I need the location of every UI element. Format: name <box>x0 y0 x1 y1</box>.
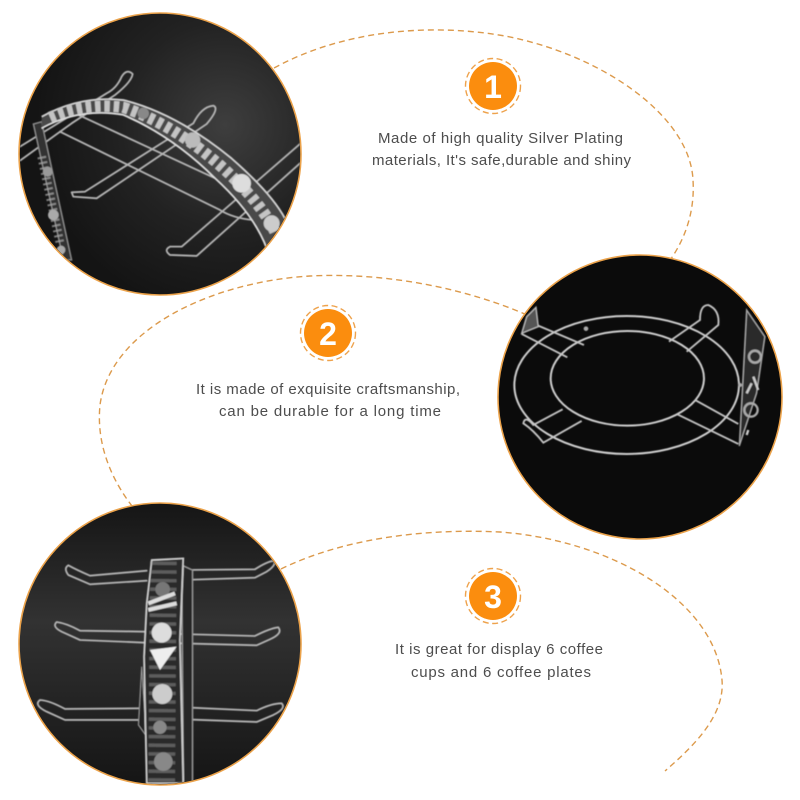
text block 2: It is made of exquisite craftsmanship, <box>196 381 460 398</box>
dashed connector 1 <box>274 30 693 263</box>
text block 1 <box>372 130 632 169</box>
badge 2: 2 <box>319 316 337 352</box>
photo circle 1: curved band with hooks <box>19 13 301 295</box>
badge 1: 1 <box>484 69 502 105</box>
badge 1 <box>466 58 520 114</box>
badge 2 <box>300 306 356 360</box>
text block 2: can be durable for a long time <box>219 403 441 420</box>
photo circle 2: round wire base <box>498 255 782 539</box>
text block 3: cups and 6 coffee plates <box>411 664 591 681</box>
dashed connector 3 <box>281 531 722 771</box>
text block 1: Made of high quality Silver Plating <box>378 130 623 147</box>
dashed connector 2 <box>99 275 527 506</box>
badge 3 <box>466 568 520 624</box>
badge 3: 3 <box>484 579 502 615</box>
text block 2 <box>196 381 460 420</box>
text block 3 <box>395 641 603 681</box>
text block 1: materials, It's safe,durable and shiny <box>372 152 632 169</box>
text block 3: It is great for display 6 coffee <box>395 641 603 658</box>
photo circle 3: front view with hooks <box>19 503 301 785</box>
